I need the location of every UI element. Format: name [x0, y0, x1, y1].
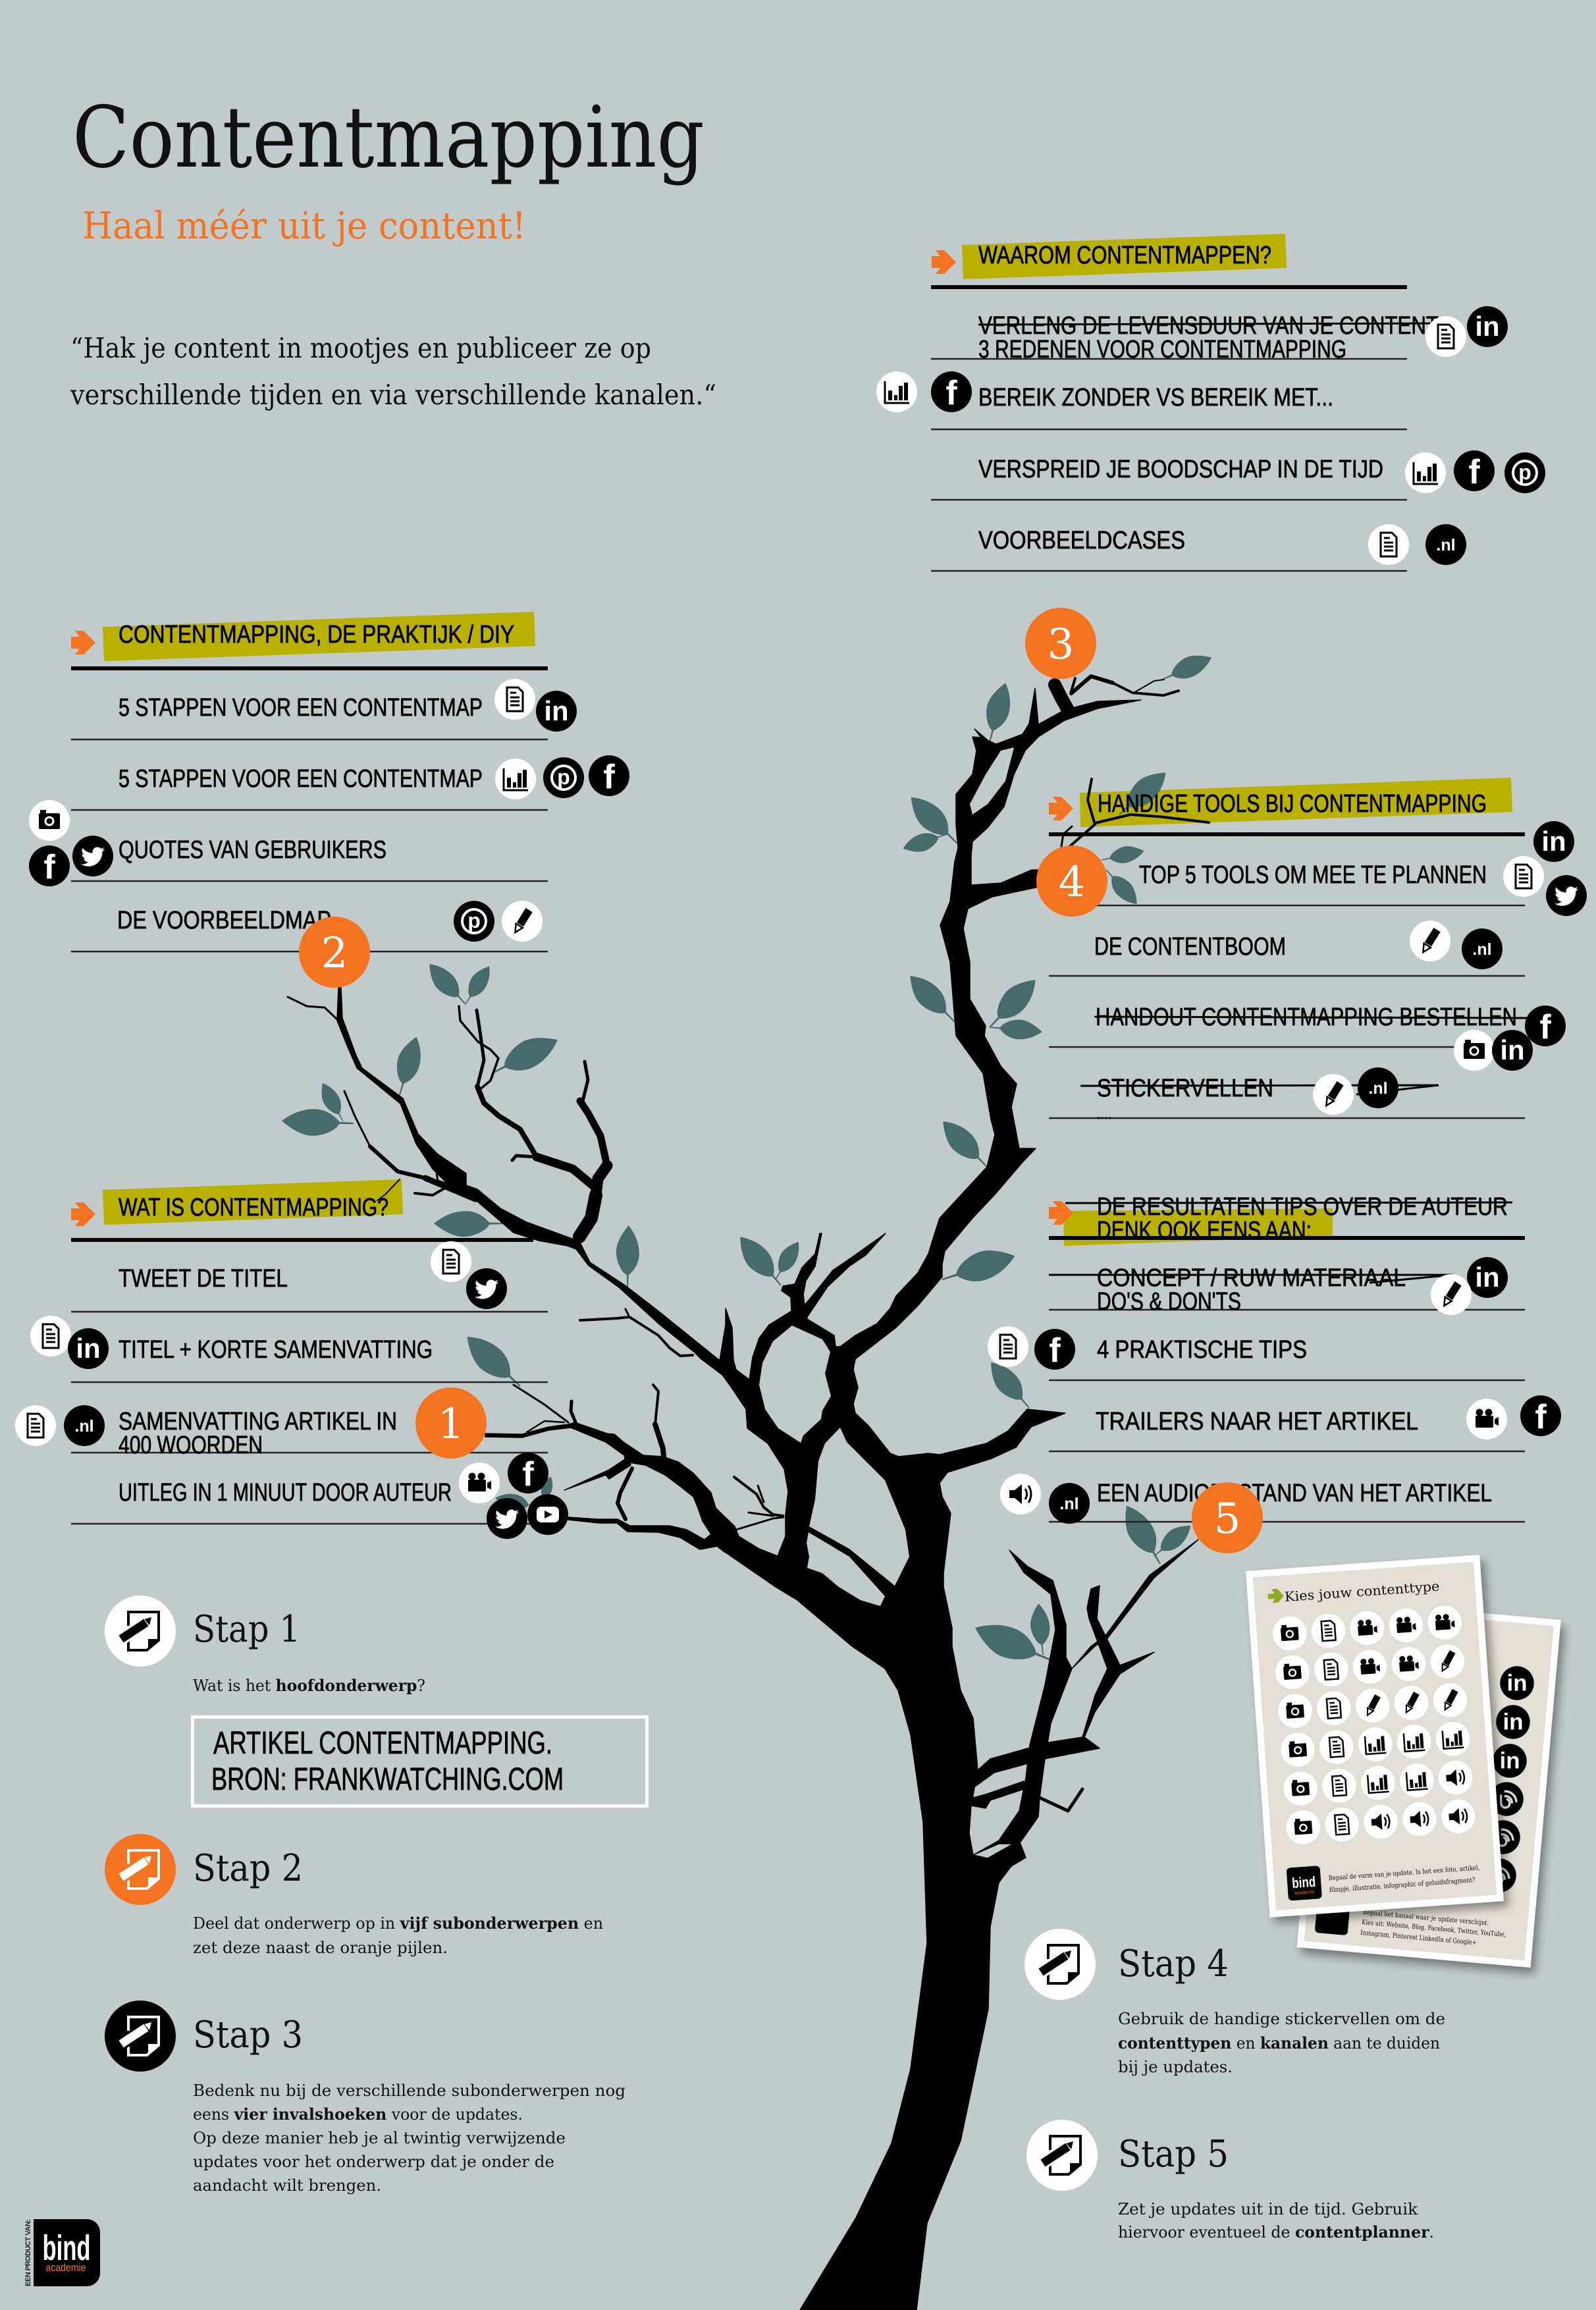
example box: BRON: FRANKWATCHING.COM	[211, 1762, 564, 1797]
panel: handige tools	[1049, 790, 1587, 1122]
heading: Stap 4	[1118, 1943, 1229, 1985]
text block	[193, 2082, 625, 2195]
row text: 3 REDENEN VOOR CONTENTMAPPING	[978, 336, 1346, 363]
row text: EEN AUDIOBESTAND VAN HET ARTIKEL	[1097, 1480, 1492, 1507]
text block	[1118, 2200, 1434, 2242]
sheet heading: Kies jouw contenttype	[1284, 1578, 1440, 1605]
icons	[29, 679, 629, 942]
row text: BEREIK ZONDER VS BEREIK MET...	[978, 384, 1333, 412]
sheet logo: academie	[1294, 1890, 1315, 1896]
step 4	[1024, 1929, 1445, 2076]
text block: contenttypen en kanalen aan te duiden	[1118, 2033, 1440, 2053]
gaps between branches	[759, 747, 1014, 1606]
heading: WAAROM CONTENTMAPPEN?	[978, 242, 1271, 269]
arrow	[1049, 797, 1073, 820]
sticker sheet: channels (back): Bepaal het kanaal waar je update verschijnt.	[1363, 1909, 1489, 1927]
text block: Op deze manier heb je al twintig verwijzende	[193, 2129, 566, 2147]
panel: wat is contentmapping	[15, 1194, 568, 1539]
text block: Deel dat onderwerp op in vijf subonderwerpen en	[193, 1914, 603, 1933]
example box	[192, 1717, 647, 1806]
icon: step 3	[105, 2001, 176, 2072]
row text: DE VOORBEELDMAP	[117, 907, 331, 934]
icon: step 2	[105, 1834, 176, 1905]
lower left branch	[568, 1517, 724, 1552]
text block: eens vier invalshoeken voor de updates.	[193, 2105, 523, 2124]
text block: Zet je updates uit in de tijd. Gebruik	[1118, 2200, 1418, 2218]
icon: step 1	[105, 1596, 176, 1667]
step 2	[105, 1834, 603, 1957]
heading: HANDIGE TOOLS BIJ CONTENTMAPPING	[1098, 790, 1487, 818]
lower right small branch	[971, 1781, 1024, 1808]
text block: hiervoor eventueel de contentplanner.	[1118, 2222, 1434, 2242]
step 5	[1026, 2120, 1434, 2242]
icon: step 4	[1024, 1929, 1096, 2000]
text block: Bedenk nu bij de verschillende subonderwerpen nog	[193, 2082, 625, 2100]
row text: DO'S & DON'TS	[1097, 1288, 1241, 1316]
tree illustration	[281, 648, 1215, 2310]
text block: Wat is het hoofdonderwerp?	[193, 1676, 425, 1695]
sheet text	[1328, 1864, 1481, 1894]
subtitle: Haal méér uit je content!	[82, 205, 526, 248]
thin branches and twigs	[288, 676, 1209, 1811]
sticker sheet: channels (back): Instagram, Pinterest LinkedIn of Google+	[1360, 1929, 1477, 1947]
intro quote: “Hak je content in mootjes en publiceer ze op	[70, 332, 651, 364]
logo: bind academie: academie	[46, 2261, 86, 2274]
sticker sheet: content types (front)	[1246, 1555, 1504, 1918]
heading: CONTENTMAPPING, DE PRAKTIJK / DIY	[119, 621, 514, 649]
arrow	[71, 1202, 95, 1226]
intro quote: verschillende tijden en via verschillende kanalen.“	[70, 379, 716, 411]
row text: TRAILERS NAAR HET ARTIKEL	[1096, 1408, 1418, 1436]
row text: 5 STAPPEN VOOR EEN CONTENTMAP	[119, 765, 483, 793]
text block	[193, 1914, 603, 1957]
paper	[1246, 1555, 1504, 1918]
panel: waarom contentmappen	[876, 242, 1545, 571]
leaves	[281, 648, 1215, 1675]
row text: TWEET DE TITEL	[119, 1265, 288, 1293]
spike branch	[564, 1457, 631, 1490]
number badge 5	[1192, 1482, 1263, 1553]
icon: step 5	[1026, 2120, 1098, 2191]
struck-through heading: DE RESULTATEN TIPS OVER DE AUTEUR	[1097, 1193, 1508, 1221]
intro quote	[70, 332, 716, 411]
number badge 4: 4	[1059, 858, 1085, 907]
sticker grid	[1271, 1605, 1476, 1845]
icons	[1313, 821, 1587, 1115]
row text: 5 STAPPEN VOOR EEN CONTENTMAP	[119, 694, 483, 722]
heading: Stap 2	[193, 1847, 303, 1890]
sheet logo: bind	[1291, 1873, 1316, 1891]
title: Contentmapping	[72, 89, 705, 187]
icons	[988, 1257, 1561, 1524]
row text: DE CONTENTBOOM	[1094, 933, 1286, 961]
row text: SAMENVATTING ARTIKEL IN	[119, 1408, 397, 1436]
panel: contentmapping de praktijk	[29, 621, 629, 952]
row text: UITLEG IN 1 MINUUT DOOR AUTEUR	[119, 1479, 452, 1507]
text block	[1118, 2010, 1445, 2076]
logo: bind academie: bind	[42, 2228, 91, 2268]
sheet logo	[1287, 1866, 1322, 1901]
struck-through row	[1080, 1075, 1439, 1102]
number badge 2	[299, 917, 370, 988]
struck-through row: STICKERVELLEN	[1097, 1075, 1273, 1102]
lower right branches	[973, 1540, 1198, 1855]
arrow	[1049, 1201, 1073, 1225]
number badge 2: 2	[321, 929, 348, 978]
row text: VERSPREID JE BOODSCHAP IN DE TIJD	[978, 456, 1383, 483]
row text: 400 WOORDEN	[119, 1432, 263, 1459]
logo: bind academie	[24, 2219, 100, 2286]
row text: TITEL + KORTE SAMENVATTING	[119, 1336, 433, 1364]
panel: denk ook eens aan	[988, 1193, 1561, 1524]
highlight bars behind headings	[103, 234, 1512, 1246]
text block: Gebruik de handige stickervellen om de	[1118, 2010, 1445, 2028]
number badge 3: 3	[1048, 620, 1074, 669]
row text: VOORBEELDCASES	[978, 527, 1185, 554]
upper left branch to badge 2	[337, 988, 579, 1246]
trunk and main branches	[485, 688, 1141, 2310]
number badge 5: 5	[1214, 1495, 1240, 1544]
text block: aandacht wilt brengen.	[193, 2176, 381, 2195]
row text: ....	[1097, 1108, 1111, 1122]
lower right fork	[975, 1586, 1154, 1786]
row text: QUOTES VAN GEBRUIKERS	[119, 836, 386, 864]
heading: WAT IS CONTENTMAPPING?	[119, 1194, 388, 1222]
struck-through row: CONCEPT / RUW MATERIAAL	[1097, 1264, 1406, 1292]
text block: updates voor het onderwerp dat je onder de	[193, 2153, 554, 2171]
struck-through row: VERLENG DE LEVENSDUUR VAN JE CONTENT	[978, 312, 1439, 340]
example box: ARTIKEL CONTENTMAPPING.	[213, 1726, 552, 1761]
number badge 1	[415, 1387, 487, 1459]
arrow	[932, 250, 956, 274]
sheet text: Bepaal de vorm van je update. Is het een foto, artikel,	[1328, 1864, 1480, 1882]
step 3	[105, 2001, 625, 2195]
number badge 4	[1036, 846, 1107, 917]
heading: Stap 1	[193, 1608, 300, 1651]
text block: bij je updates.	[1118, 2058, 1233, 2076]
number badge 1: 1	[438, 1400, 464, 1449]
sticker sheet: channels (back): Kies uit: Website, Blog, Facebook, Twitter, YouTube,	[1362, 1919, 1506, 1939]
logo: bind academie: EEN PRODUCT VAN:	[24, 2219, 32, 2286]
sheet text: filmpje, illustratie, infographic of geluidsfragment?	[1329, 1877, 1476, 1894]
arrow	[71, 631, 95, 655]
heading: DENK OOK EENS AAN:	[1097, 1217, 1312, 1245]
text block: zet deze naast de oranje pijlen.	[193, 1939, 448, 1957]
icons	[876, 306, 1545, 565]
row text: TOP 5 TOOLS OM MEE TE PLANNEN	[1139, 861, 1487, 889]
sticker sheet: channels (back)	[1297, 1599, 1561, 1968]
heading: Stap 5	[1118, 2133, 1229, 2176]
icons	[15, 1241, 568, 1539]
step 1	[105, 1596, 647, 1806]
row text: 4 PRAKTISCHE TIPS	[1097, 1336, 1307, 1364]
heading: Stap 3	[193, 2014, 303, 2056]
number badge 3	[1025, 608, 1096, 679]
